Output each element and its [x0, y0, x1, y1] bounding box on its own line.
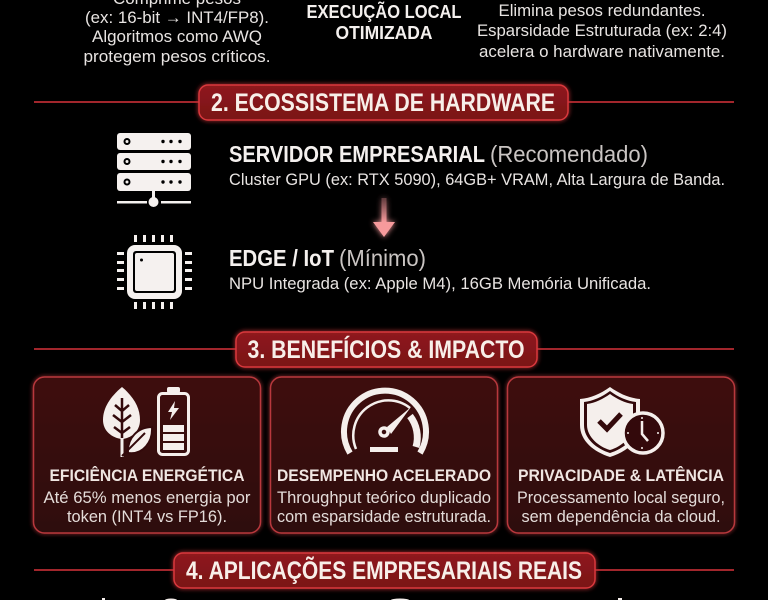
text: enterprise server [229, 141, 725, 189]
text: edge iot [229, 245, 651, 293]
text: accelerated performance: Throughput teórico duplicado [277, 488, 491, 507]
panel: privacy and latency [508, 377, 734, 533]
text: energy efficiency: Até 65% menos energia por [44, 488, 251, 507]
heading: local execution: OTIMIZADA [336, 23, 433, 43]
text: edge iot: (Mínimo) [339, 245, 426, 271]
text: enterprise server: SERVIDOR EMPRESARIAL [229, 141, 485, 167]
arrow: server to edge [373, 198, 395, 237]
text: accelerated performance: DESEMPENHO ACELERADO [277, 466, 491, 485]
text: edge iot: EDGE / IoT [229, 245, 334, 271]
heading: local execution [306, 1, 462, 43]
text block: pruning: Elimina pesos redundantes. [498, 1, 706, 20]
panel: energy efficiency [34, 377, 260, 533]
icon: leaves and battery [103, 387, 188, 457]
heading: local execution: EXECUÇÃO LOCAL [306, 1, 462, 22]
panel: accelerated performance [270, 377, 498, 533]
text: privacy and latency: PRIVACIDADE & LATÊNCIA [518, 466, 724, 485]
text: edge iot: NPU Integrada (ex: Apple M4), 16GB Memória Unificada. [229, 274, 651, 293]
text: privacy and latency: Processamento local seguro, [517, 488, 725, 507]
section header 3 [34, 332, 734, 367]
text: privacy and latency: sem dependência da cloud. [522, 507, 720, 526]
text block: quantization: (ex: 16-bit → INT4/FP8). [85, 8, 269, 27]
text block: pruning [477, 1, 727, 61]
section header 2 [34, 85, 734, 120]
text block: quantization: Algoritmos como AWQ [92, 27, 262, 46]
text block: quantization [84, 0, 270, 66]
icon: chip [117, 235, 192, 309]
text block: pruning: Esparsidade Estruturada (ex: 2:4) [477, 21, 727, 40]
section header 3: 3. BENEFÍCIOS & IMPACTO [248, 335, 524, 364]
section header 4 [34, 553, 734, 588]
text: enterprise server: Cluster GPU (ex: RTX 5090), 64GB+ VRAM, Alta Largura de Banda. [229, 170, 725, 189]
text: energy efficiency: EFICIÊNCIA ENERGÉTICA [50, 466, 244, 485]
text: accelerated performance [277, 466, 491, 526]
text: energy efficiency [44, 466, 251, 526]
text: enterprise server: (Recomendado) [490, 141, 648, 167]
text: privacy and latency [517, 466, 725, 526]
text block: pruning: acelera o hardware nativamente. [479, 42, 725, 61]
icon: shield and clock [580, 387, 663, 457]
icon: server [117, 133, 191, 207]
cropped icons at bottom edge [102, 598, 622, 600]
section header 4: 4. APLICAÇÕES EMPRESARIAIS REAIS [186, 555, 582, 585]
text: energy efficiency: token (INT4 vs FP16). [67, 507, 227, 526]
icon: speedometer gauge [344, 391, 426, 453]
text: accelerated performance: com esparsidade estruturada. [277, 507, 491, 526]
text block: quantization: protegem pesos críticos. [84, 47, 270, 66]
section header 2: 2. ECOSSISTEMA DE HARDWARE [211, 89, 555, 117]
